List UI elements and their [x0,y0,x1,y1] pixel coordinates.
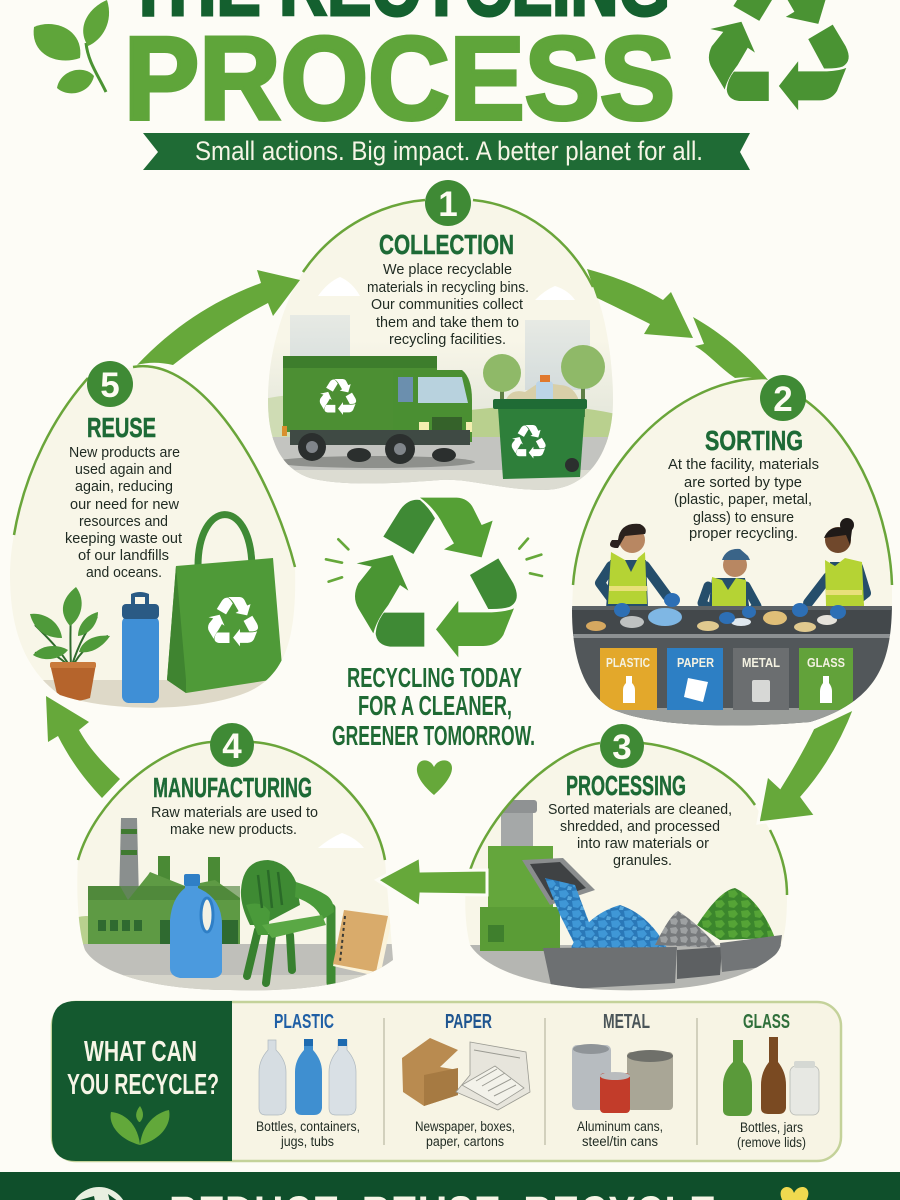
bin [493,375,587,479]
text: collection [367,262,529,348]
slogan: FOR A CLEANER, [358,690,512,721]
text: sorting: (plastic, paper, metal, [674,492,812,508]
scene: reusable items [30,511,282,708]
outline arc [466,743,787,895]
arrow: sorting to processing [758,708,855,823]
trees [483,345,605,417]
panel: step 2 sorting [565,375,900,728]
text: manufacturing: make new products. [170,822,297,838]
footer [0,1172,900,1200]
number 3: 3 [612,728,632,767]
slogan [332,662,535,751]
icon: yellow heart [781,1187,808,1200]
outline arc [14,366,295,567]
heading: manufacturing: MANUFACTURING [153,772,312,803]
scene: processing [460,800,795,995]
number 4: 4 [222,727,242,766]
bin: paper [667,648,723,710]
text: reuse: keeping waste out [65,531,182,547]
column: paper [402,1011,530,1149]
panel: step 4 manufacturing [70,723,400,995]
dividers [384,1018,697,1145]
column: glass: Bottles, jars [740,1120,803,1135]
bin: metal: METAL [742,655,780,670]
heading: processing: PROCESSING [566,770,686,801]
gloves [614,593,846,624]
slogan: GREENER TOMORROW. [332,720,535,751]
bin gray [677,947,722,979]
column: paper: Newspaper, boxes, [415,1119,515,1134]
column: metal: METAL [603,1011,650,1033]
icon: bag recycling symbol [208,597,258,646]
text: reuse: our need for new [70,497,180,513]
worker right [808,518,866,612]
pile blue [570,905,668,950]
text: reuse: again, reducing [75,479,173,495]
text: reuse: and oceans. [86,565,162,581]
icon: leaves [34,0,109,93]
factory [88,818,240,944]
heading: reuse: REUSE [87,412,156,443]
text: processing [548,802,732,869]
text: collection: them and take them to [376,315,519,331]
plant [30,587,110,701]
text: processing: granules. [613,853,672,869]
text: reuse [65,445,182,581]
left label [52,1001,232,1161]
left label: YOU RECYCLE? [67,1069,219,1101]
conveyor [565,606,900,728]
column: plastic: jugs, tubs [280,1134,334,1149]
text: collection: We place recyclable [383,262,512,278]
outline arc [303,200,593,287]
arrow: processing to manufacturing [377,857,487,907]
central recycling symbol [326,498,542,657]
text: reuse: resources and [79,514,168,530]
heading: sorting: SORTING [705,425,803,456]
number 5 [87,361,133,407]
blue falling granules [545,878,590,945]
text: sorting: At the facility, materials [668,457,819,473]
worker middle [702,549,757,616]
panel: what can you recycle [52,1001,841,1161]
text: reuse: New products are [69,445,180,461]
text: collection: materials in recycling bins. [367,280,529,296]
number 1: 1 [438,185,458,224]
column: glass: GLASS [743,1011,790,1033]
bottle [122,592,159,703]
column: metal: steel/tin cans [582,1134,658,1149]
worker left [600,524,667,608]
text: sorting [668,457,819,542]
arrow: manufacturing to reuse [46,696,120,798]
column: plastic [256,1011,360,1149]
scene: street [260,277,620,500]
scene: sorting line [565,518,900,728]
pile green [697,888,775,940]
number 4 [210,723,254,767]
text: sorting: glass) to ensure [693,510,794,526]
outline arc [78,742,385,860]
number 2: 2 [773,380,793,419]
arrow: reuse to collection [137,270,300,365]
bin: metal [733,648,789,710]
text: processing: into raw materials or [577,836,709,852]
icon: truck recycling symbol [320,379,356,415]
text: collection: Our communities collect [371,297,523,313]
column: paper: PAPER [445,1011,492,1033]
machine [480,800,595,951]
panel: step 1 collection [260,180,620,500]
number 5: 5 [100,366,120,405]
text: reuse: of our landfills [78,548,169,564]
column: glass [723,1011,819,1150]
notepad [333,910,392,977]
panel: step 3 processing [460,724,795,995]
heading: collection: COLLECTION [379,229,514,260]
icon: globe [70,1187,128,1200]
column: metal: Aluminum cans, [577,1119,663,1134]
column: metal [572,1011,673,1149]
column: paper: paper, cartons [426,1134,504,1149]
icon: bin recycling symbol [512,425,546,459]
panel: step 5 reuse [0,361,300,715]
text: sorting: are sorted by type [684,475,802,491]
text: manufacturing: Raw materials are used to [151,805,318,821]
clouds [318,277,575,300]
column: plastic: Bottles, containers, [256,1119,360,1134]
bin: glass [799,648,853,710]
bin: plastic [600,648,657,710]
text: manufacturing [151,805,318,838]
bin: plastic: PLASTIC [606,655,650,670]
number 3 [600,724,644,768]
truck [282,356,472,464]
column: plastic: PLASTIC [274,1011,334,1033]
number 1 [425,180,471,226]
text: sorting: proper recycling. [689,526,798,542]
outline arc [573,378,892,585]
icon: heart [417,760,452,795]
bin: glass: GLASS [807,655,845,670]
title: PROCESS [124,13,675,145]
bag [167,515,283,693]
bin blue [543,947,677,990]
bin: paper: PAPER [677,655,715,670]
scene: factory [70,818,400,995]
arrow: collection to sorting [587,269,768,380]
icon: recycling symbol top right [709,0,849,110]
slogan: RECYCLING TODAY [347,662,522,693]
text: processing: Sorted materials are cleaned, [548,802,732,818]
number 2 [760,375,806,421]
column: glass: (remove lids) [737,1135,806,1150]
banner: Small actions. Big impact. A better planet for all. [195,136,703,166]
jug [170,874,222,978]
bin green [720,935,782,972]
text: reuse: used again and [75,462,172,478]
pile gray [655,911,718,948]
text: processing: shredded, and processed [560,819,720,835]
chair [241,860,334,983]
text: collection: recycling facilities. [389,332,506,348]
left label: WHAT CAN [84,1036,197,1068]
